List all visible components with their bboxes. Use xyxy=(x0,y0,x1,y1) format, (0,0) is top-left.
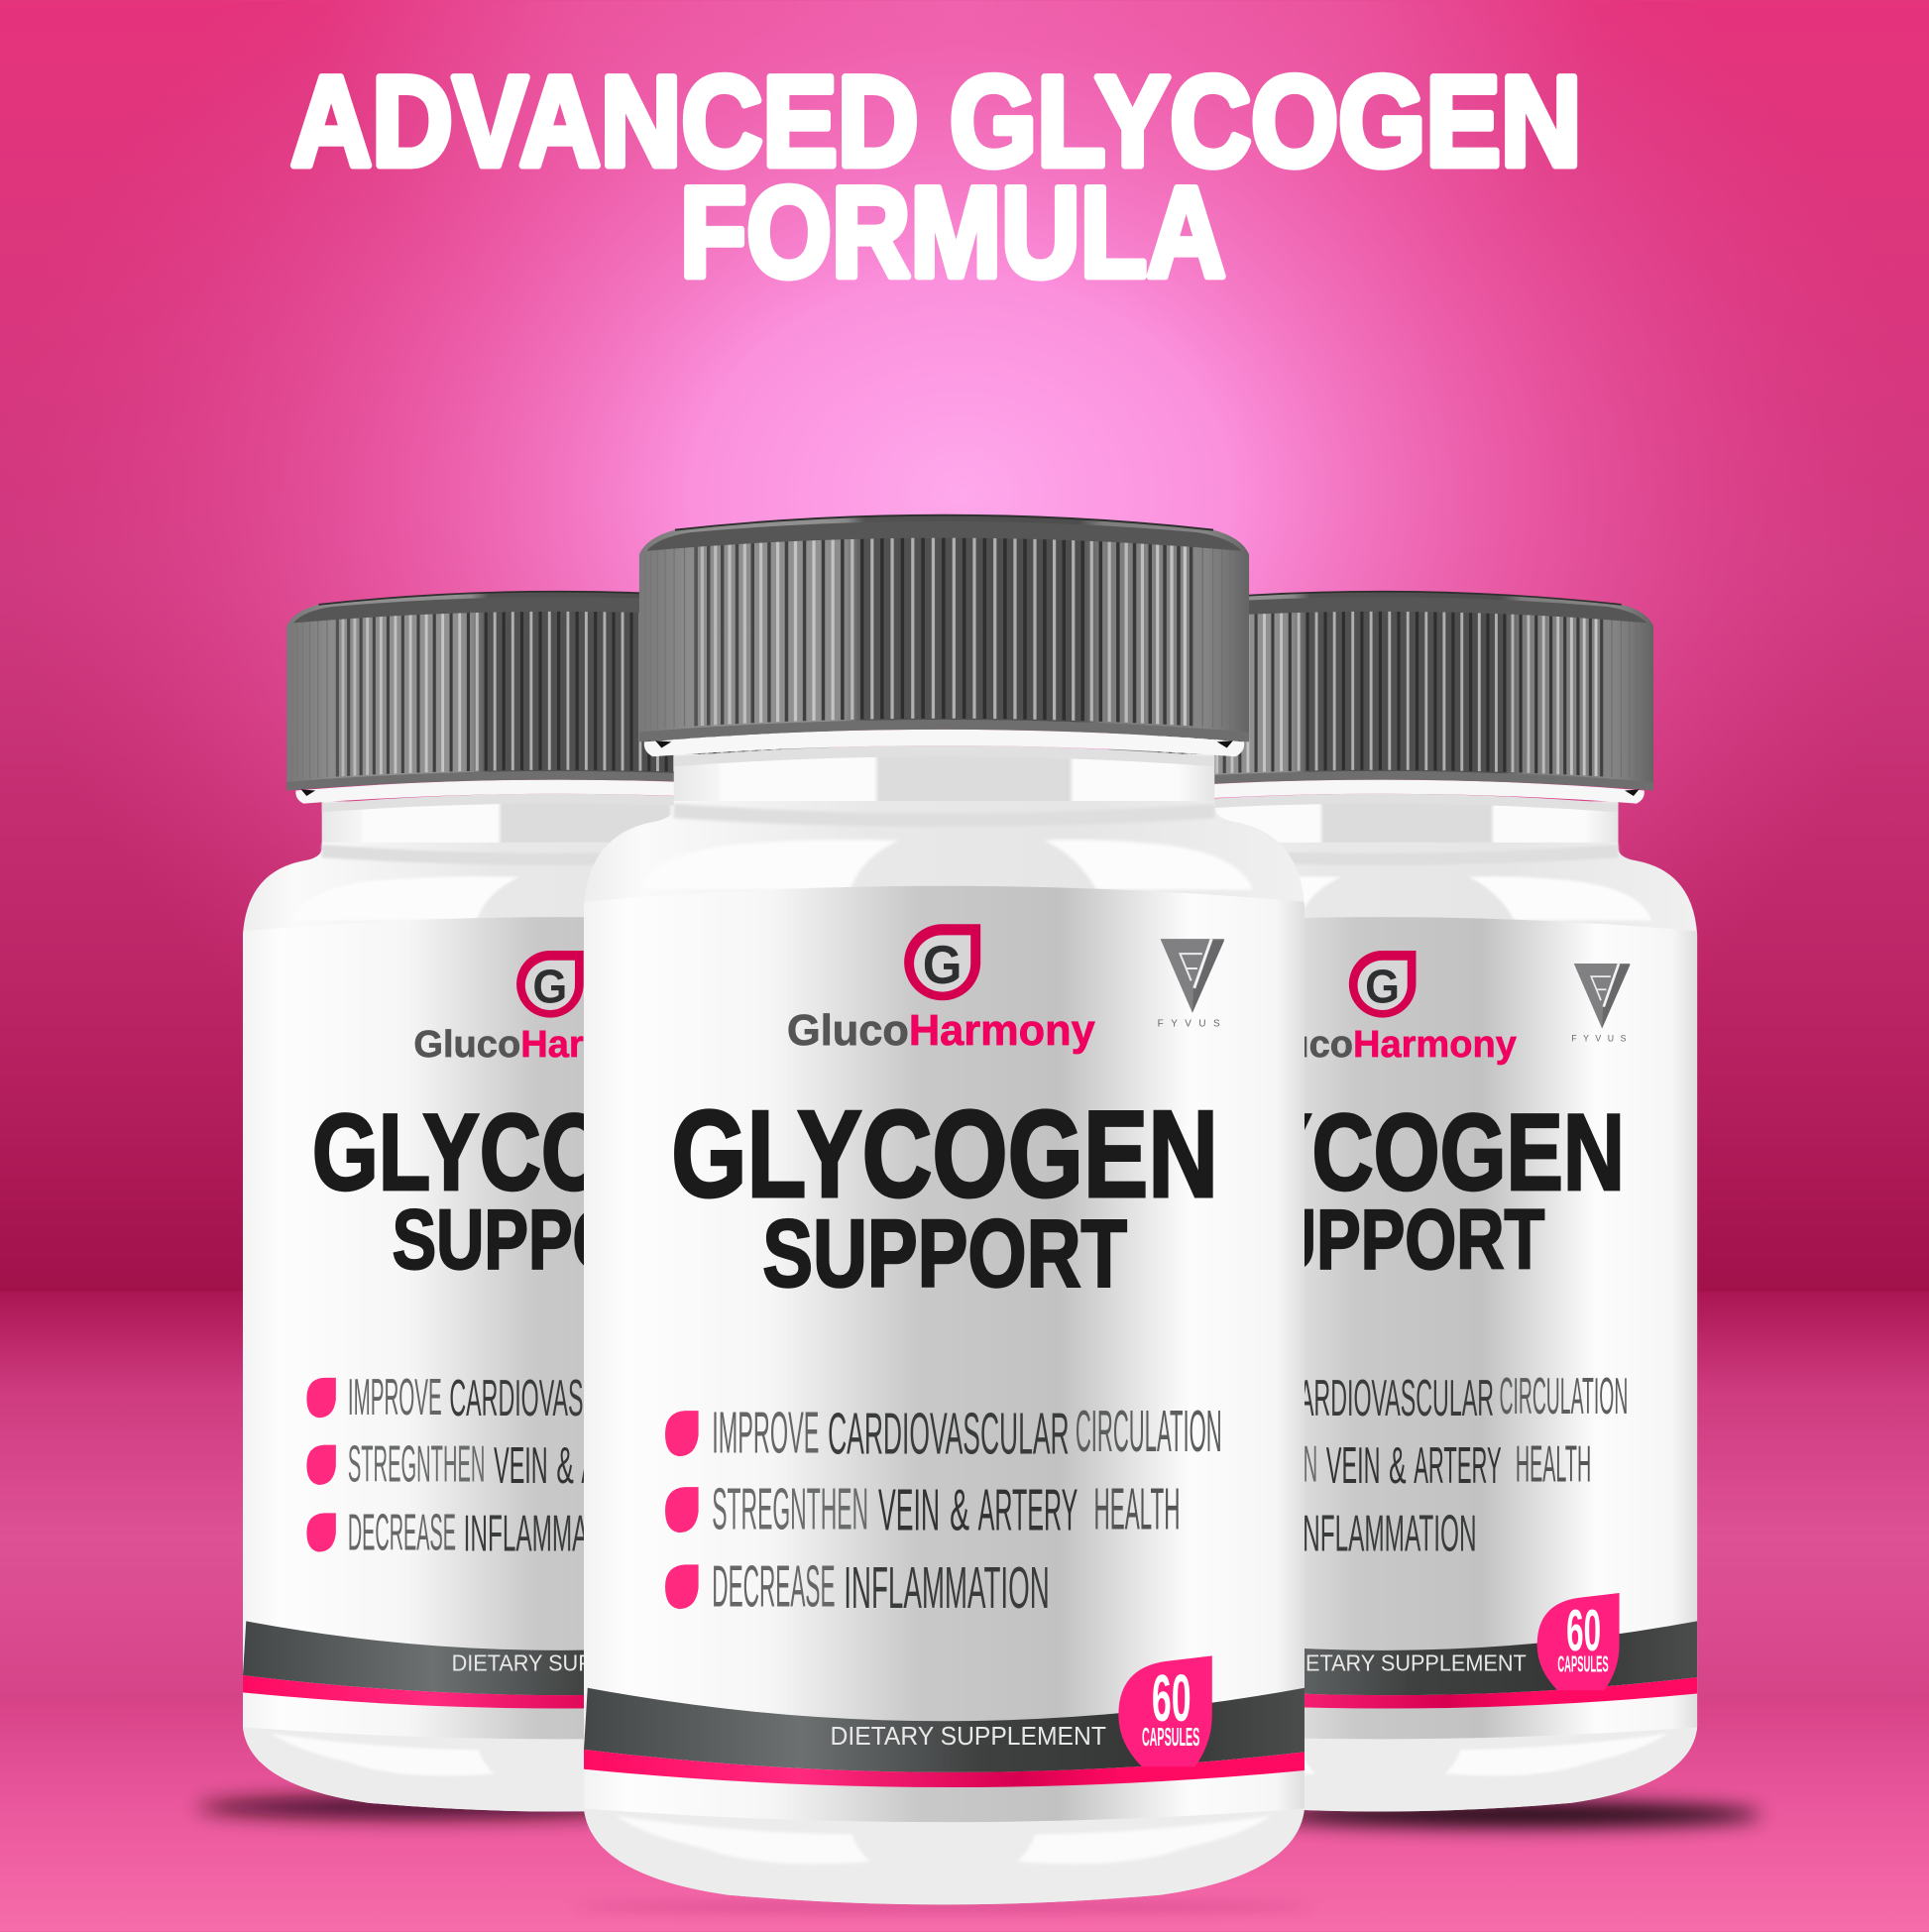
center bottle xyxy=(584,515,1305,1909)
left bottle label text: INFLAMMATION xyxy=(464,1506,644,1563)
left bottle: CIRCULATION xyxy=(667,1368,796,1425)
benefits list xyxy=(665,1398,1222,1621)
left bottle label text: ARTERY xyxy=(582,1437,669,1495)
benefits list: INFLAMMATION xyxy=(844,1554,1050,1621)
right bottle label text: SUPPORT xyxy=(1224,1193,1544,1288)
right bottle label text: FYVUS xyxy=(1571,1034,1633,1044)
product name: SUPPORT xyxy=(762,1199,1127,1307)
right bottle label text: 60 xyxy=(1566,1599,1601,1663)
icon: GlucoHarmony drop logo xyxy=(904,924,980,1000)
center bottle cap xyxy=(639,515,1249,748)
right bottle label text: CAPSULES xyxy=(1557,1651,1609,1677)
brand name: GlucoHarmony xyxy=(787,1007,1095,1055)
product name xyxy=(671,1086,1218,1307)
product name: GLYCOGEN xyxy=(671,1086,1218,1223)
left bottle label text: CARDIOVASCULAR xyxy=(449,1370,661,1427)
left bottle label text: DIETARY SUPPLEMENT xyxy=(452,1650,694,1676)
floor shadow under side bottles xyxy=(197,1796,1761,1913)
left bottle label text: STREGNTHEN xyxy=(348,1436,485,1494)
icon: FYVUS logo xyxy=(1158,939,1227,1029)
center bottle shell xyxy=(584,730,1305,1909)
benefits list: ARTERY xyxy=(978,1477,1078,1543)
center bottle: CIRCULATION xyxy=(1076,1398,1222,1464)
right bottle label text: ARTERY xyxy=(1414,1437,1502,1495)
right bottle label text: IMPROVE xyxy=(1181,1369,1275,1426)
left bottle shell xyxy=(243,780,875,1816)
right bottle label text: STREGNTHEN xyxy=(1181,1436,1317,1494)
right bottle label text: DIETARY SUPPLEMENT xyxy=(1284,1650,1527,1676)
left bottle label text: GLYCOGEN xyxy=(312,1092,792,1213)
benefits list: STREGNTHEN xyxy=(712,1475,868,1541)
right bottle label text: DECREASE xyxy=(1181,1504,1289,1561)
left bottle label text: SUPPORT xyxy=(393,1193,713,1288)
left bottle label text: IMPROVE xyxy=(348,1369,442,1426)
badge: 60 capsules xyxy=(1118,1655,1212,1766)
right bottle label text: HEALTH xyxy=(1516,1436,1591,1494)
left bottle label text: & xyxy=(556,1437,574,1495)
right bottle xyxy=(1065,592,1697,1816)
right bottle label text xyxy=(1145,951,1633,1690)
left bottle label text: GlucoHarmony xyxy=(413,1023,685,1066)
left bottle cap xyxy=(286,592,832,796)
title xyxy=(290,51,1582,304)
left bottle label text: HEALTH xyxy=(683,1436,758,1494)
right bottle label text: G xyxy=(1365,961,1400,1013)
benefits list: & xyxy=(950,1477,969,1543)
right bottle shell xyxy=(1065,780,1697,1816)
right bottle label text: GLYCOGEN xyxy=(1145,1092,1625,1213)
center bottle: CAPSULES xyxy=(1142,1722,1199,1752)
benefits list: IMPROVE xyxy=(712,1399,819,1465)
icon: GlucoHarmony drop logo: G xyxy=(923,935,963,995)
right bottle cap xyxy=(1108,592,1653,796)
right bottle label text: & xyxy=(1389,1437,1407,1495)
left bottle xyxy=(243,592,875,1816)
icon: FYVUS logo: FYVUS xyxy=(1158,1018,1227,1029)
badge: 60 capsules: 60 xyxy=(1152,1661,1191,1736)
benefits list: HEALTH xyxy=(1093,1475,1180,1541)
left bottle label text: G xyxy=(532,961,567,1013)
benefits list: VEIN xyxy=(878,1477,940,1543)
right bottle: CIRCULATION xyxy=(1499,1368,1628,1425)
right bottle label text: GlucoHarmony xyxy=(1246,1023,1518,1066)
benefits list: CARDIOVASCULAR xyxy=(828,1401,1070,1467)
right bottle label text: INFLAMMATION xyxy=(1296,1506,1477,1563)
right bottle label text: CARDIOVASCULAR xyxy=(1282,1370,1494,1427)
left bottle label text: VEIN xyxy=(494,1437,548,1495)
title: FORMULA xyxy=(680,162,1225,304)
band text: DIETARY SUPPLEMENT xyxy=(831,1721,1106,1751)
left bottle label text: DECREASE xyxy=(348,1504,456,1561)
left bottle label text xyxy=(306,951,796,1676)
title: ADVANCED GLYCOGEN xyxy=(290,51,1582,193)
right bottle label text: VEIN xyxy=(1326,1437,1380,1495)
benefits list: DECREASE xyxy=(712,1553,836,1620)
